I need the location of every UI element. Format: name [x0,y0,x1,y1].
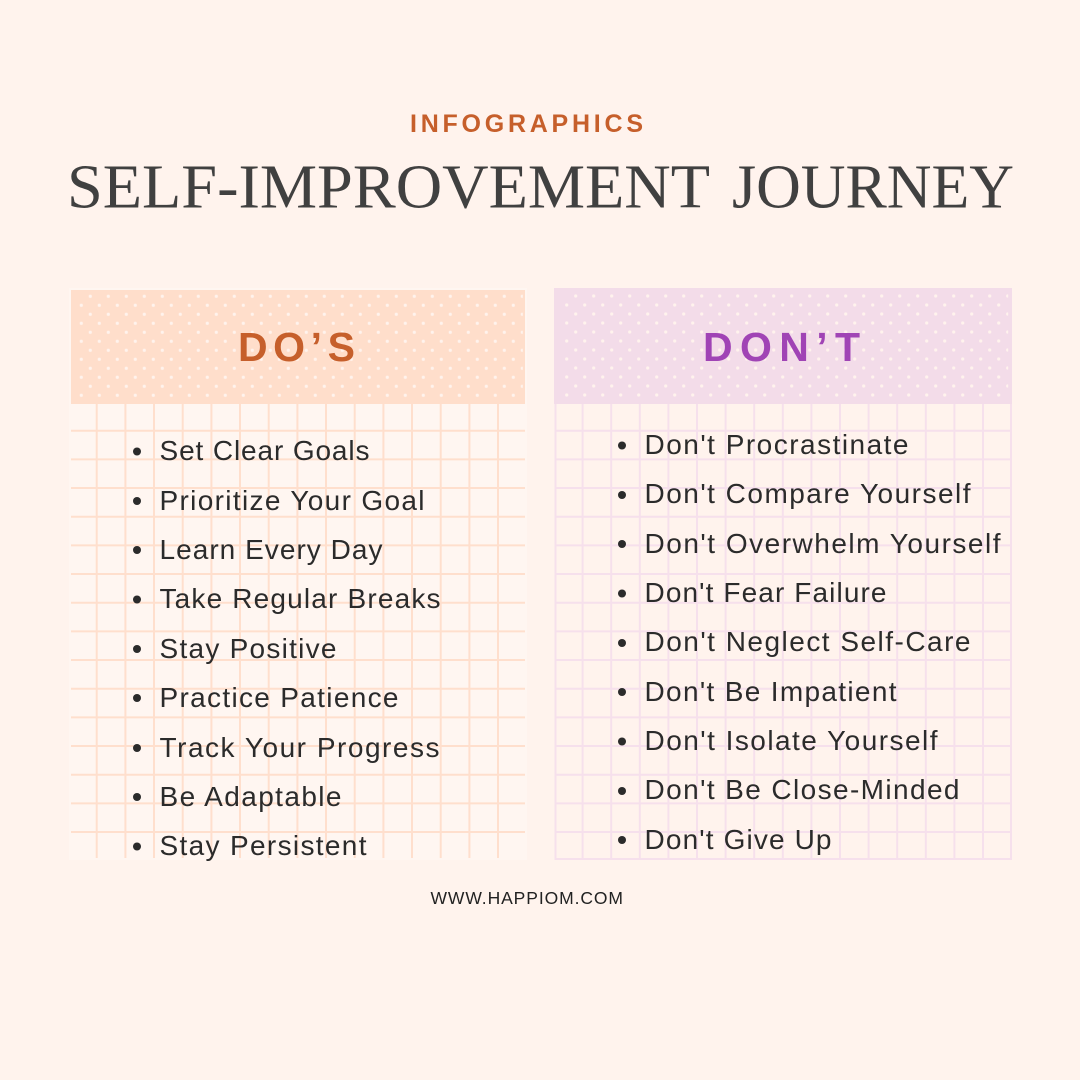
list: do's: Learn Every Day [160,534,382,565]
list: do's: Practice Patience [160,682,398,713]
list: don't: Don't Overwhelm Yourself [644,528,1001,559]
list: don't: Don't Be Impatient [644,676,897,707]
eyebrow: infographics: INFOGRAPHICS [410,110,643,138]
list: do's: Set Clear Goals [160,435,370,466]
title [67,154,1014,222]
header: do's: DO’S [238,324,355,370]
list: do's: Track Your Progress [160,732,440,763]
list: do's: Stay Positive [160,633,336,664]
panel: don't [554,288,1012,860]
header: don't: DON’T [703,324,860,370]
list: don't: Don't Procrastinate [644,429,908,460]
footer url: WWW.HAPPIOM.COM [430,888,623,908]
list: do's [133,435,440,861]
list: don't: Don't Fear Failure [644,577,886,608]
header: do's [71,290,525,404]
list: do's: Prioritize Your Goal [160,485,424,516]
list: do's: Stay Persistent [160,830,367,861]
header: don't [554,288,1012,404]
title: JOURNEY [732,154,1014,222]
list: don't [618,429,1001,855]
grid: don't [555,404,1012,860]
list: don't: Don't Compare Yourself [644,478,971,509]
grid: do's [71,404,525,858]
panel: do's [69,288,527,861]
list: do's: Take Regular Breaks [160,583,440,614]
list: don't: Don't Isolate Yourself [644,725,938,756]
title: SELF-IMPROVEMENT [67,154,710,222]
list: do's: Be Adaptable [160,781,342,812]
list: don't: Don't Be Close-Minded [644,774,960,805]
list: don't: Don't Neglect Self-Care [644,626,970,657]
list: don't: Don't Give Up [644,824,832,855]
panel background: do's [69,288,527,860]
